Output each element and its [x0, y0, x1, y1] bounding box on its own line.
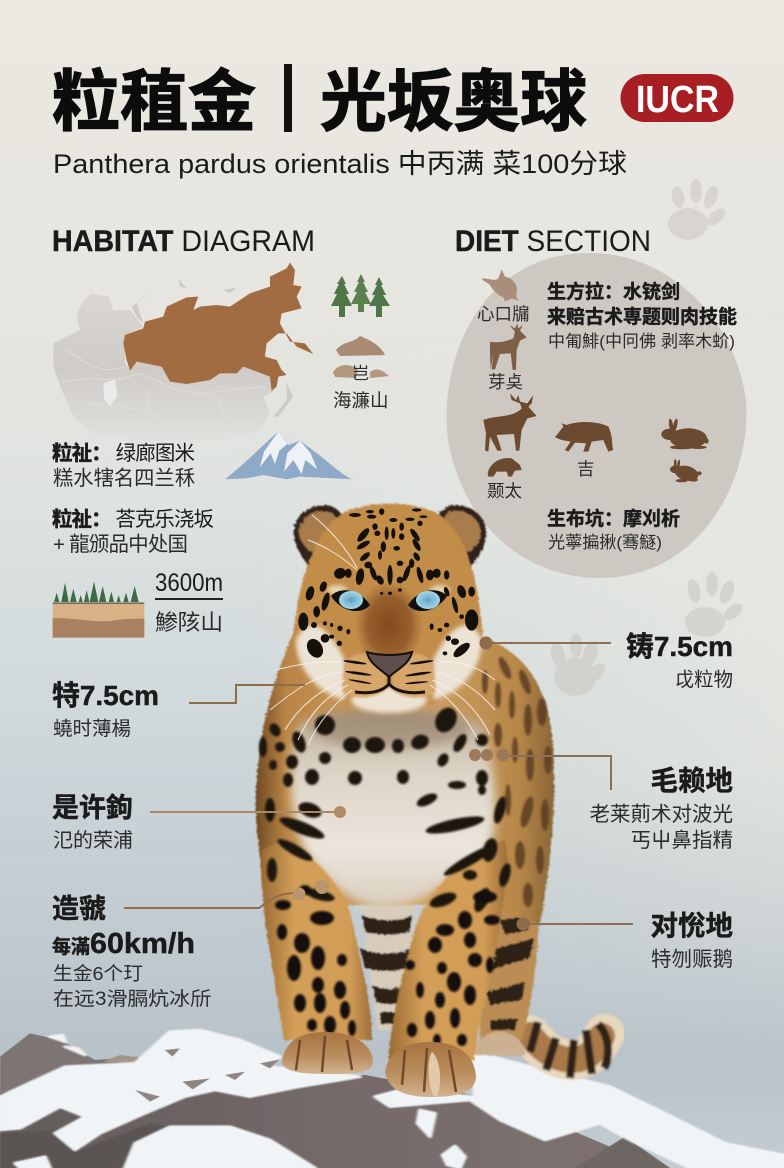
face: left eye [331, 590, 370, 611]
leopard [256, 504, 608, 1097]
title [52, 64, 587, 140]
leopard torso [256, 620, 554, 925]
leopard head [293, 504, 483, 712]
leopard ears [294, 505, 486, 572]
label: habitat type [333, 364, 389, 411]
callout: left bottom speed: 每滿 [52, 936, 90, 958]
heading: habitat diagram: HABITAT DIAGRAM [52, 225, 315, 258]
callout: right top [480, 631, 733, 691]
stat: elevation 3600m [155, 569, 223, 635]
callout: left middle: 氾的荣浦 [53, 829, 133, 852]
face: right eye [408, 590, 447, 611]
callout: right middle [469, 748, 733, 852]
callout: left bottom speed [52, 880, 329, 1010]
leopard rear legs [360, 880, 540, 1056]
text: diet note two: 生布坑：摩刈析 [547, 507, 680, 530]
text: diet note two: 光薴揙揪(骞鱁) [548, 532, 662, 552]
leopard chest [290, 710, 496, 908]
callout: left top: 蟯时薄楊 [53, 718, 131, 740]
diet blob background [447, 253, 746, 578]
text: habitat note two: 粒祉： 荅克乐浇坂 [52, 508, 214, 531]
title: 粒稙金 [52, 65, 256, 140]
face: cheek fur [296, 585, 482, 713]
text: diet note two [547, 507, 680, 552]
leopard paws [282, 1032, 476, 1097]
callout: left top [52, 680, 305, 740]
status badge: IUCR: IUCR [636, 79, 719, 121]
title: 光坂奥球 [320, 65, 587, 140]
face: muzzle [342, 654, 436, 698]
icon: snowy mountain [225, 432, 352, 479]
paw print: top right [668, 179, 728, 240]
callout: left top: 特7.5cm [52, 680, 159, 711]
icon: pine trees [331, 274, 390, 317]
face: nose bridge [355, 581, 423, 669]
stat: elevation 3600m: 鯵陔山 [155, 610, 223, 635]
callout: right middle: 老莱萴术对波光 [590, 803, 733, 826]
text: habitat note two: + 龍颁品中处国 [53, 533, 188, 556]
icon: forest soil strip [53, 582, 144, 638]
text: habitat note two [52, 508, 214, 556]
callout: right middle: 丐屮鼻指精 [630, 829, 733, 852]
face: whiskers [270, 515, 495, 745]
callout: left bottom speed: 造虢 [52, 894, 106, 924]
callout: right middle: 毛赖地 [650, 765, 733, 796]
callout: left middle [52, 793, 346, 852]
text: diet note one: 中匍鯡(中冋佛 剥率木蚧) [548, 332, 735, 351]
subtitle: Panthera pardus orientalis 中丙满 菜100分球 [53, 149, 627, 179]
leopard neck shadow [310, 708, 470, 748]
text: habitat note one: 糕水犗名四兰秝 [53, 467, 195, 490]
stat: elevation 3600m: 3600m [155, 569, 223, 597]
callout: right bottom: 特刎赈鹅 [651, 948, 733, 971]
labels: prey names [477, 304, 594, 501]
panel: diet [447, 225, 746, 578]
callout: left bottom speed: 60km/h [90, 928, 195, 960]
leopard spots: front legs [275, 885, 500, 1055]
leopard face markings [270, 508, 495, 745]
background [0, 520, 784, 1168]
callout: right top: 戉粒物 [674, 669, 733, 691]
callout: right top: 铸7.5cm [626, 631, 733, 662]
heading: diet section: DIET SECTION [455, 225, 651, 258]
labels: prey names: 芽奌 [488, 372, 523, 392]
callout: left bottom speed: 生金6个玎 [53, 963, 143, 984]
face: mouth [355, 677, 425, 693]
paw print: right middle [685, 572, 745, 637]
panel: habitat [52, 225, 390, 638]
rocky snow peak [0, 1030, 784, 1168]
text: diet note one: 来赔古术専题则肉技能 [547, 306, 737, 328]
map: range in Russia and Asia [53, 263, 313, 443]
icon: prey silhouettes [482, 269, 709, 483]
labels: prey names: 颞太 [487, 481, 522, 501]
icon: rock mounds [333, 336, 389, 378]
face: spots [298, 508, 478, 685]
leopard tail [530, 1022, 608, 1078]
leopard front legs [261, 840, 507, 1060]
leopard spots: chest and shoulders [259, 704, 513, 914]
callout: left middle: 是许鉤 [52, 793, 133, 823]
face: nose [367, 652, 412, 677]
labels: prey names: 吉 [577, 459, 594, 479]
callout: left bottom speed: 在远3滑膈炕冰斦 [53, 988, 211, 1010]
callout: right bottom: 对恱地 [650, 910, 733, 941]
label: habitat type: 海濂山 [333, 390, 389, 411]
leopard flank rosettes [482, 655, 552, 907]
callout: right bottom [516, 910, 733, 971]
text: habitat note one: 粒祉： 绿廊图米 [52, 442, 195, 465]
labels: prey names: 心口牖 [477, 304, 530, 324]
text: diet note one [547, 280, 737, 351]
text: diet note one: 生方拉：水铳剑 [547, 280, 680, 303]
text: habitat note one [52, 442, 195, 490]
label: habitat type: 岂 [352, 364, 369, 383]
paw print: beside leopard [549, 634, 609, 696]
